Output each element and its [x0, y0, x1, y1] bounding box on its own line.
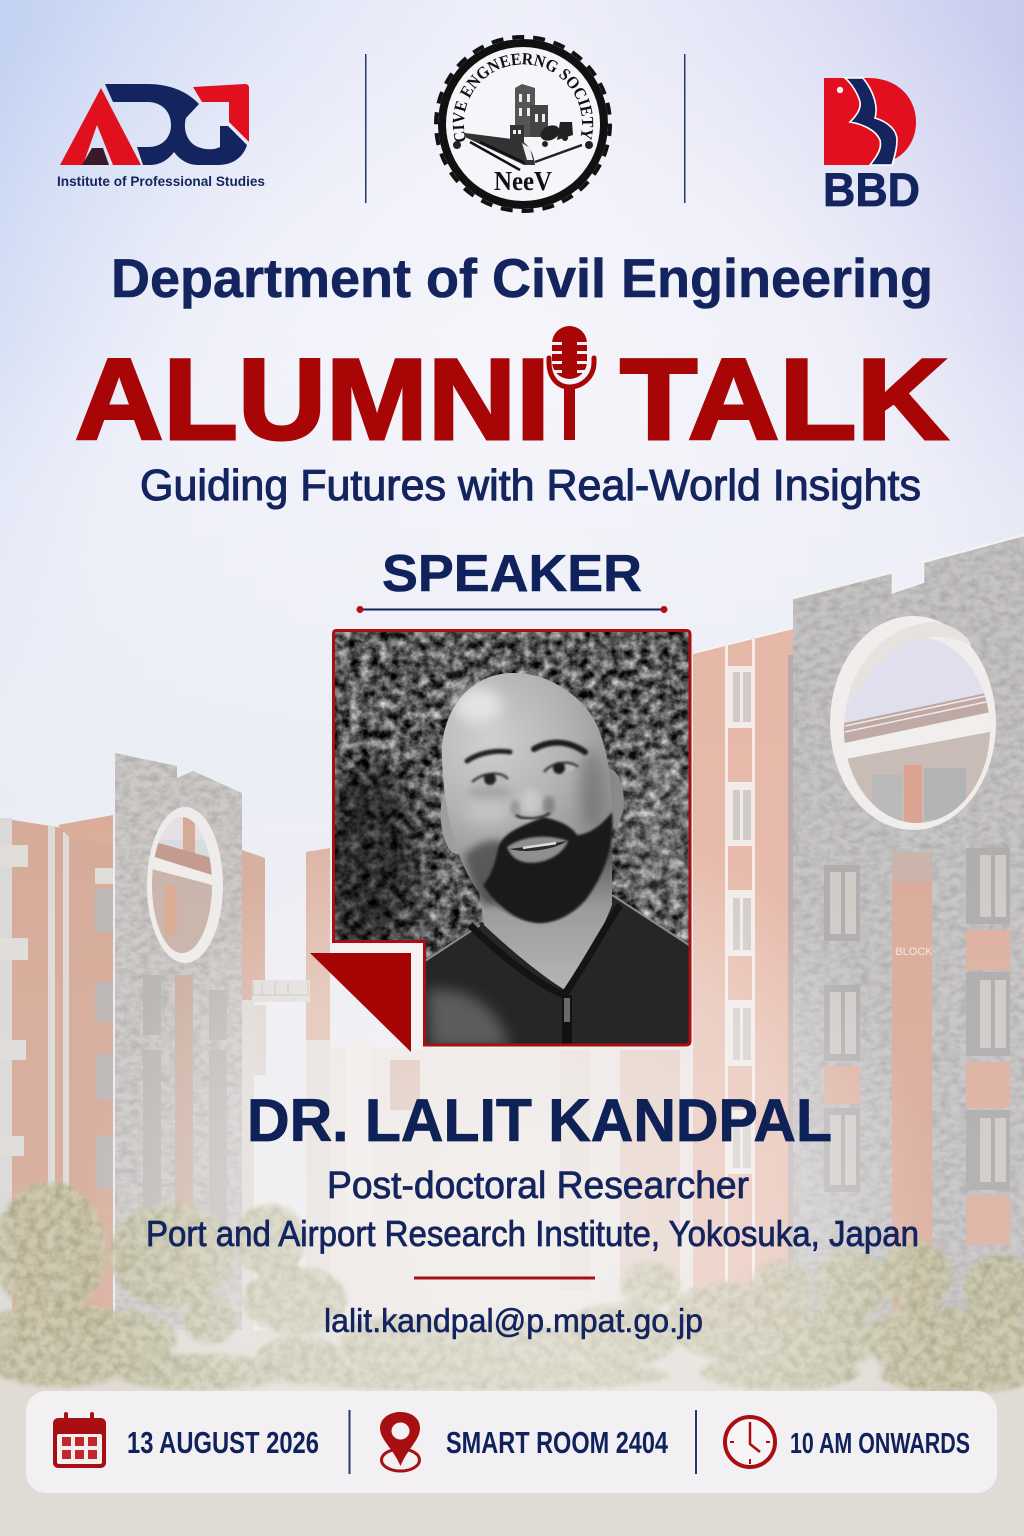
- stone tower: [793, 535, 1024, 1340]
- title: Alumni Talk: [75, 326, 948, 464]
- ring window: [830, 616, 996, 830]
- red corner triangle: [310, 953, 411, 1052]
- venue: SMART ROOM 2404: [446, 1425, 669, 1460]
- speaker email: lalit.kandpal@p.mpat.go.jp: [324, 1302, 703, 1339]
- jacket: [425, 895, 689, 1048]
- pale haze over photo background: [0, 700, 1024, 1536]
- ADG mark: [60, 84, 249, 165]
- speaker affiliation: Port and Airport Research Institute, Yokosuka, Japan: [146, 1213, 919, 1254]
- seal buildings: [510, 84, 548, 147]
- central haze behind speaker text: [80, 800, 940, 1420]
- seal train: [465, 133, 535, 170]
- logo: ADG: [57, 84, 265, 189]
- neck: [478, 855, 612, 990]
- eyes: [467, 743, 585, 785]
- campus building: right block: [693, 535, 1024, 1340]
- head: [442, 673, 612, 923]
- ground: [0, 1330, 1024, 1536]
- photo: [320, 629, 695, 1049]
- speaker heading: [356, 545, 668, 613]
- logo: BBD: [823, 78, 920, 216]
- ears: [440, 794, 459, 854]
- eyebrows: [467, 751, 510, 761]
- speaker name: DR. LALIT KANDPAL: [247, 1087, 832, 1154]
- BBD mark: [824, 78, 916, 165]
- red divider: [414, 1276, 595, 1280]
- stone front windows: [824, 848, 1010, 1192]
- beard: [483, 812, 613, 923]
- tagline: Guiding Futures with Real-World Insights: [140, 461, 921, 510]
- title: Alumni Talk: TALK: [620, 336, 948, 464]
- title: Alumni Talk: ALUMNI: [75, 336, 550, 464]
- icon: clock: [725, 1417, 775, 1467]
- speaker role: Post-doctoral Researcher: [327, 1165, 749, 1207]
- central brick column: [892, 852, 932, 1332]
- seal mixer truck: [535, 122, 582, 162]
- stubble: [464, 841, 504, 905]
- date: 13 AUGUST 2026: [127, 1425, 319, 1460]
- campus building: left block: [0, 753, 330, 1340]
- icon: location pin: [380, 1412, 420, 1471]
- stone tower: [115, 753, 242, 1330]
- ADG caption: Institute of Professional Studies: [57, 173, 265, 189]
- left brick wing: [0, 818, 113, 1340]
- speaker heading: SPEAKER: [382, 545, 642, 603]
- logo: Civil Engineering Society seal: [434, 35, 612, 213]
- zipper: [562, 995, 572, 1048]
- divider left: [365, 54, 366, 203]
- divider right: [684, 54, 686, 203]
- building sign: BLOCK: [895, 946, 933, 958]
- nose: [521, 789, 541, 815]
- heading: department: Department of Civil Engineering: [111, 247, 933, 309]
- mouth: [507, 837, 568, 863]
- ring window: [147, 807, 223, 963]
- trees and garden: [0, 1182, 1024, 1393]
- central distant building: [330, 1040, 693, 1338]
- icon: calendar: [53, 1412, 106, 1468]
- panel: event details: [26, 1391, 997, 1493]
- icon: microphone: [549, 326, 594, 440]
- seal NeeV: NeeV: [494, 166, 552, 196]
- photo frame: [334, 630, 690, 1045]
- BBD wordmark: BBD: [823, 163, 920, 216]
- seal ring lettering: CIVE ENGNEERNG SOCIETY: [452, 53, 594, 142]
- brick wing: [693, 628, 793, 1340]
- side wings: [242, 850, 265, 1000]
- panel: speaker photo: [310, 629, 695, 1052]
